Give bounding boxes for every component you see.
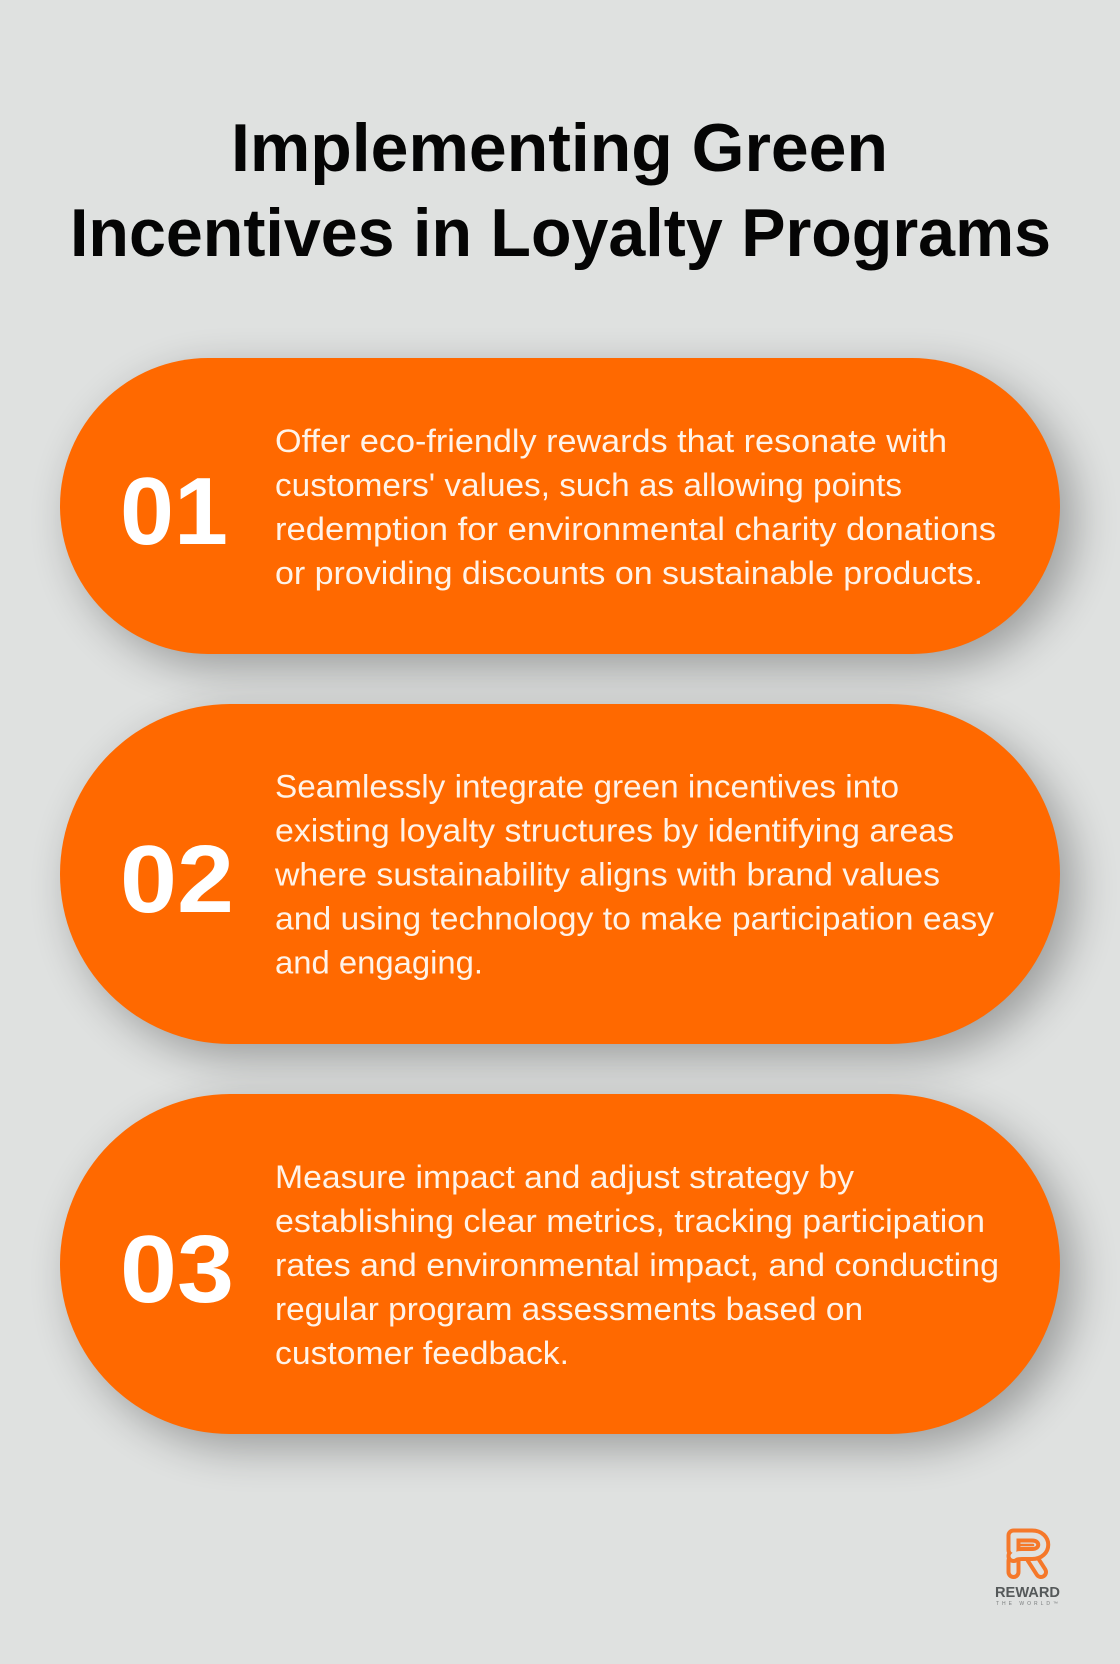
text: step 03 description: regular program assessments based on (275, 1291, 863, 1327)
panel: step 02 (60, 704, 1074, 1058)
text: step 03 description (275, 1159, 999, 1371)
text: step 03 description: establishing clear metrics, tracking participation (275, 1203, 985, 1239)
icon: R mark (1014, 1536, 1043, 1572)
text: step 03 description: Measure impact and adjust strategy by (275, 1159, 854, 1195)
text: step 03 description: customer feedback. (275, 1335, 569, 1371)
text: step 02 description (274, 768, 994, 980)
panel: step 03 (60, 1094, 1074, 1448)
text: step 01 description (275, 423, 996, 591)
text: step 01 description: Offer eco-friendly rewards that resonate with (275, 423, 947, 459)
text: step 02 description: and using technology to make participation easy (275, 900, 994, 936)
logo wordmark: REWARD (995, 1584, 1060, 1601)
title (70, 110, 1051, 271)
text: step 02 description: existing loyalty structures by identifying areas (275, 812, 954, 848)
title: Implementing Green (231, 110, 888, 186)
text: step 01 description: customers' values, such as allowing points (275, 467, 902, 503)
number 02: 02 (120, 826, 234, 933)
number 03: 03 (120, 1216, 234, 1323)
panel: step 01 (60, 358, 1074, 668)
text: step 02 description: where sustainability aligns with brand values (274, 856, 940, 892)
text: step 02 description: and engaging. (275, 944, 483, 980)
text: step 03 description: rates and environmental impact, and conducting (275, 1247, 999, 1283)
text: step 01 description: redemption for environmental charity donations (275, 511, 996, 547)
logo: Reward the World (995, 1536, 1060, 1607)
logo tagline: THE WORLD™ (996, 1601, 1058, 1607)
title: Incentives in Loyalty Programs (70, 195, 1051, 271)
number 01: 01 (120, 458, 228, 565)
text: step 02 description: Seamlessly integrate green incentives into (275, 768, 899, 804)
text: step 01 description: or providing discounts on sustainable products. (275, 555, 983, 591)
